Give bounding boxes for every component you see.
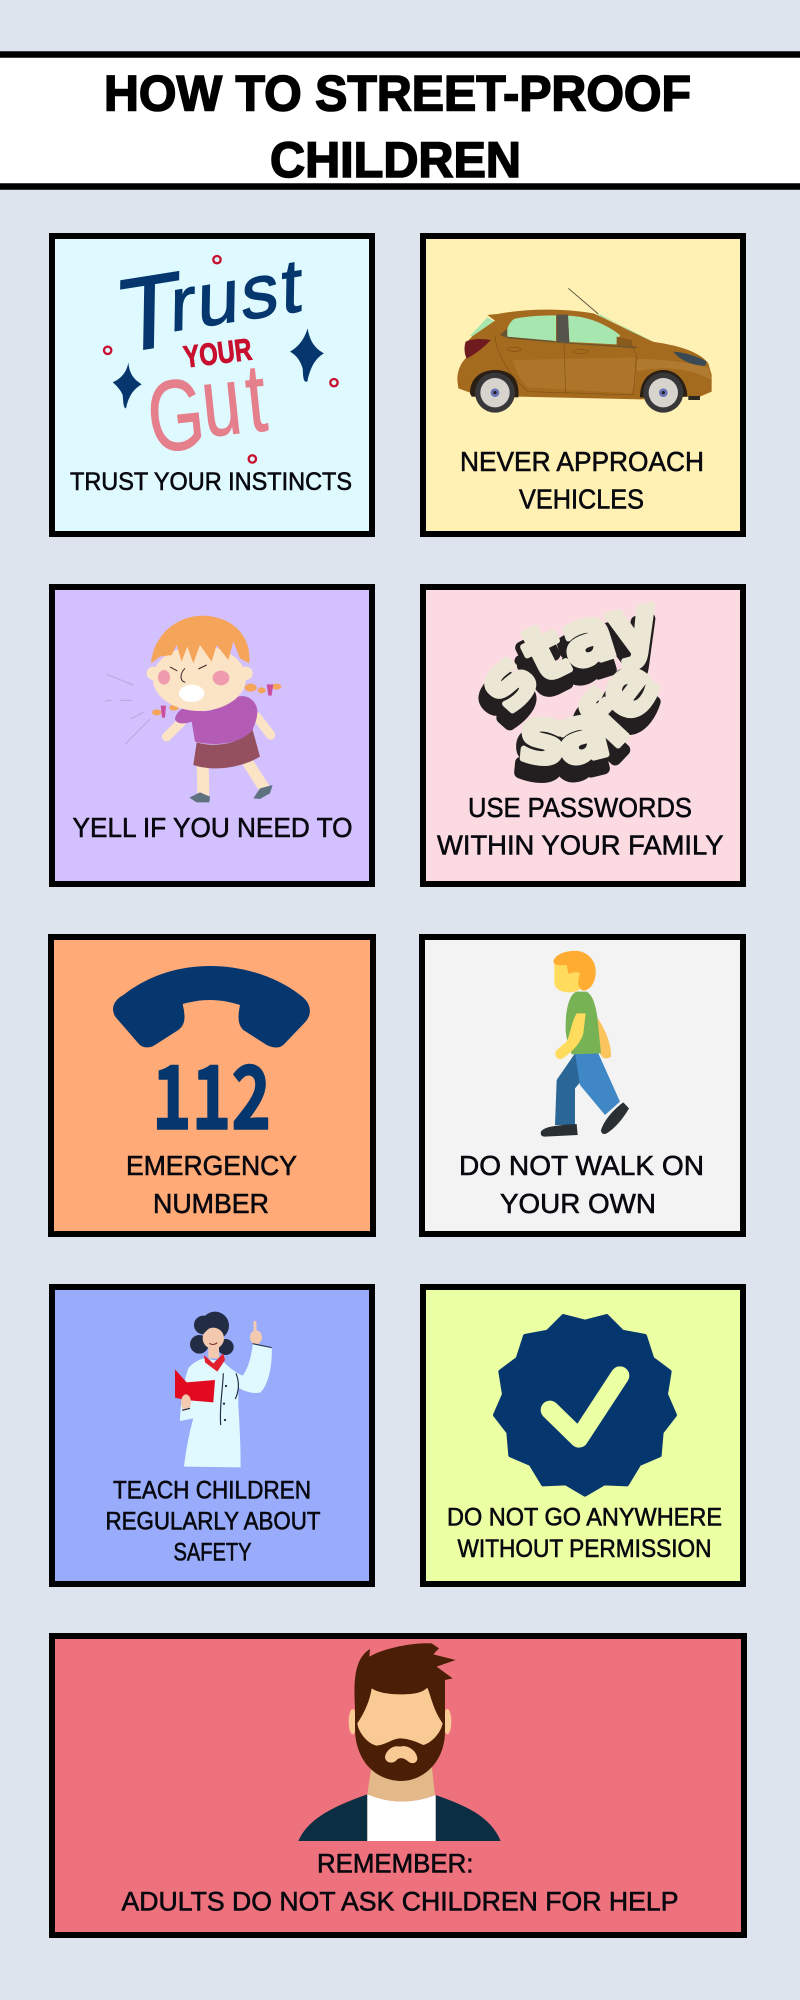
label [437, 792, 724, 860]
label [460, 446, 704, 514]
title [104, 66, 691, 188]
label: TRUST YOUR INSTINCTS [70, 468, 352, 496]
icon: trust your gut lettering: ut [196, 343, 277, 457]
panel: yell if you need to [52, 587, 372, 884]
panel: do not walk on your own [422, 937, 743, 1234]
icon: trust your gut lettering [104, 230, 338, 474]
label: DO NOT GO ANYWHERE [447, 1504, 722, 1532]
title: HOW TO STREET-PROOF [104, 66, 691, 122]
label: VEHICLES [519, 484, 644, 514]
title banner [0, 54, 800, 188]
label: TEACH CHILDREN [113, 1476, 311, 1504]
icon: bearded man [298, 1643, 501, 1841]
panel: never approach vehicles [423, 236, 743, 534]
panel: emergency number [51, 937, 373, 1234]
icon: stay safe lettering: stay [484, 602, 655, 714]
label [126, 1150, 297, 1219]
number 112: 112 [152, 1028, 271, 1155]
label [459, 1150, 704, 1219]
icon: stay safe lettering: stay [478, 614, 656, 730]
panel: do not go anywhere [423, 1287, 743, 1584]
icon: trust your gut lettering: T [117, 250, 181, 376]
label: SAFETY [174, 1538, 252, 1566]
label: NEVER APPROACH [460, 446, 704, 477]
icon: stay safe lettering [478, 602, 661, 783]
icon: walking person [541, 951, 629, 1137]
label: REMEMBER: [317, 1848, 474, 1878]
icon: verified badge [495, 1316, 675, 1495]
icon: stay safe lettering: safe [520, 668, 660, 766]
icon: teacher with book [175, 1312, 272, 1467]
panel: trust your instincts [52, 230, 372, 534]
icon: trust your gut lettering: G [142, 357, 210, 474]
label [447, 1504, 722, 1563]
title: CHILDREN [270, 132, 521, 188]
label: EMERGENCY [126, 1150, 297, 1181]
label [122, 1848, 678, 1916]
icon: trust your gut lettering: YOUR [182, 333, 254, 375]
label: WITHOUT PERMISSION [458, 1535, 712, 1563]
icon: car [457, 288, 712, 413]
label: NUMBER [153, 1188, 269, 1219]
icon: stay safe lettering: safe [514, 684, 661, 783]
icon: yelling girl [105, 616, 281, 802]
panel: use passwords [420, 584, 746, 887]
label [106, 1476, 320, 1566]
label: YELL IF YOU NEED TO [72, 812, 352, 843]
label: WITHIN YOUR FAMILY [437, 830, 724, 860]
panel: teach children [52, 1287, 372, 1584]
label: YOUR OWN [500, 1188, 656, 1219]
label: ADULTS DO NOT ASK CHILDREN FOR HELP [122, 1886, 678, 1916]
label: DO NOT WALK ON [459, 1150, 704, 1181]
label: USE PASSWORDS [468, 792, 692, 823]
label: REGULARLY ABOUT [106, 1508, 320, 1536]
icon: telephone handset [113, 966, 310, 1048]
panel: remember [52, 1636, 744, 1935]
icon: trust your gut lettering: rust [170, 243, 305, 349]
